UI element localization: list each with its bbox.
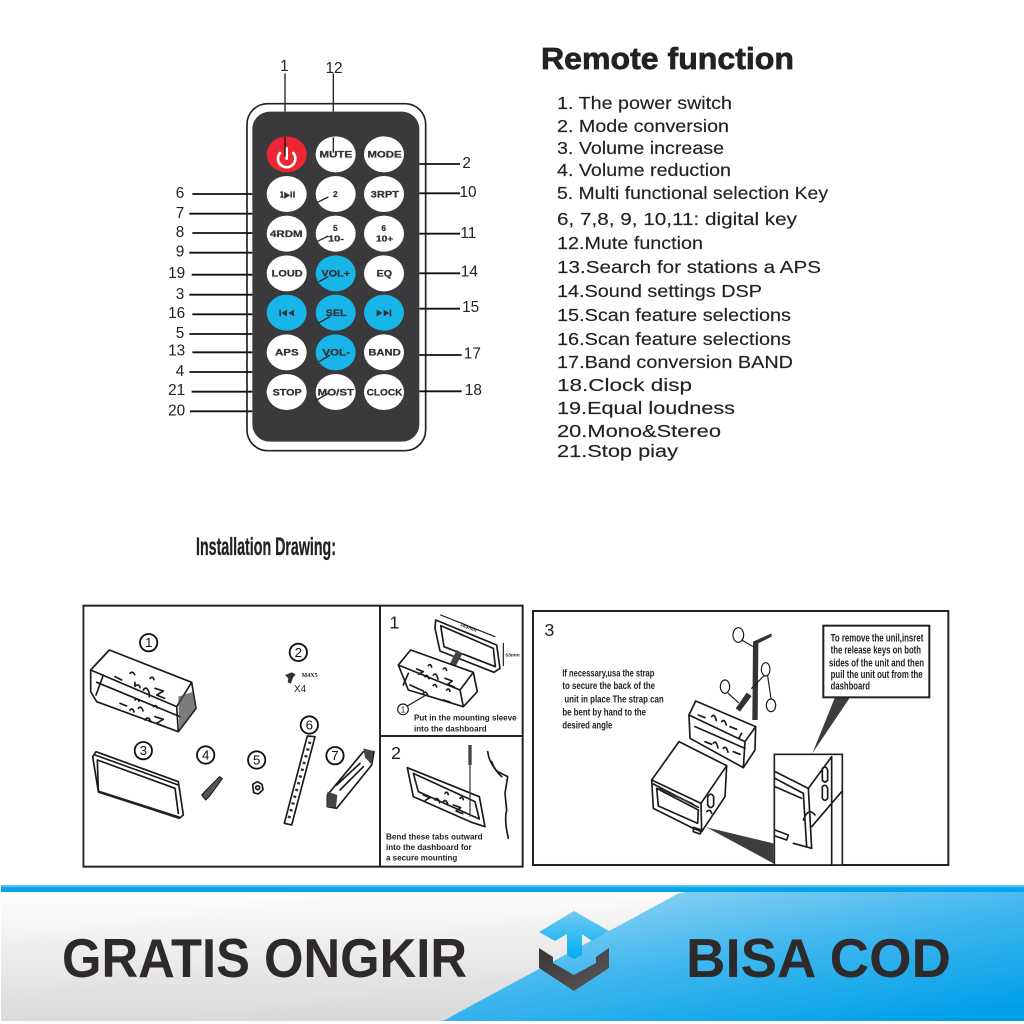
step 2 illustration: 2 [391,743,401,763]
left callout numbers: 3 [176,286,184,303]
step 2 caption: into the dashboard for [386,842,472,852]
button labels: 4RDM [270,229,303,239]
button labels: LOUD [272,269,303,279]
button labels: BAND [368,348,401,358]
left callout numbers: 16 [168,305,185,322]
button labels: 3RPT [371,189,399,199]
left callout numbers: 5 [176,325,184,342]
banner top strip [1,885,1024,892]
button labels: MO/ST [318,387,354,397]
top callout numbers: 1 [280,58,289,75]
right callout numbers: 15 [462,299,479,316]
button labels: CLOCK [367,387,403,397]
function list: 6, 7,8, 9, 10,11: digital key [557,209,797,229]
part 4: bolt [197,746,222,800]
remote body [247,104,426,451]
button labels: EQ [377,269,392,279]
step 1 illustration: 1 [389,612,399,632]
button labels [270,150,403,397]
button labels: MODE [367,150,402,160]
step 1 illustration: 53mm [505,653,520,659]
callout pointer wedge [812,697,850,753]
function list: 18.Clock disp [557,375,692,395]
step 2 caption: Bend these tabs outward [386,831,483,841]
function list: 21.Stop piay [557,441,678,461]
panel frames [83,606,523,867]
part 2: screw: X4 [294,684,307,695]
part 5: nut: 5 [253,752,260,767]
button labels: 10+ [376,234,393,244]
inset detail [774,754,842,865]
step 1 illustration: 1 [401,705,406,714]
button pointer lines [285,73,333,400]
function list: 19.Equal loudness [557,398,735,418]
part 1: mounting sleeve [91,634,196,732]
part 2: screw: 2 [295,645,302,660]
strap instructions: be bent by hand to the [562,708,646,719]
part 4: bolt: 4 [202,747,210,762]
mounting sleeve [689,701,756,768]
left callout numbers: 8 [176,224,184,241]
button labels: VOL- [322,348,350,358]
strap and bolt assembly [720,628,776,720]
step 1 illustration [389,612,520,715]
part 3: trim frame: 3 [140,743,147,758]
banner text: BISA COD: BISA COD [686,927,951,989]
right callout numbers: 14 [461,263,478,280]
left callout numbers: 20 [168,402,185,419]
function list: 5. Multi functional selection Key [557,183,828,203]
part 2: screw [285,644,318,695]
remote control diagram [168,58,482,451]
function list: 16.Scan feature selections [557,329,791,349]
function list: 13.Search for stations a APS [557,257,821,277]
button labels: MUTE [319,150,352,160]
strap instructions: to secure the back of the [562,681,655,692]
callout box: puil the unit out from the [831,669,923,681]
step number: 3 [544,620,554,640]
step 1 caption: into the dashboard [414,723,487,733]
function list [557,93,828,461]
right leader lines [419,164,462,391]
button labels: SEL [326,308,347,318]
heading: Installation Drawing: Installation Drawing: [196,533,336,561]
function list: 20.Mono&Stereo [557,421,721,441]
button labels: 1▶II [279,189,295,199]
left callout numbers: 9 [176,243,184,260]
button labels: 10- [328,234,344,244]
strap instructions [562,669,664,732]
function list: 12.Mute function [557,233,703,253]
part 1: mounting sleeve: 1 [145,635,152,650]
button labels: 6 [381,223,386,233]
right callout numbers: 11 [460,225,476,242]
panel: parts and steps 1 and 2 [83,606,523,867]
part 5: nut [248,751,265,794]
step 2 caption [386,831,483,862]
function list: 15.Scan feature selections [557,305,791,325]
function list: 1. The power switch [557,93,732,113]
part 7: release key [326,747,374,808]
left callout numbers: 7 [176,205,184,222]
panel: step 3 [533,611,948,865]
left callout numbers: 13 [168,342,185,359]
step 1 caption [414,713,517,733]
right callout numbers: 2 [462,155,471,172]
left callout numbers: 4 [176,363,185,380]
callout box [823,626,929,697]
function list: 3. Volume increase [557,138,724,158]
left callout numbers: 6 [176,185,184,202]
pointer wedge to inset [707,827,773,863]
button labels: 5 [333,223,338,233]
button labels: VOL+ [321,269,351,279]
strap instructions: desired angle [562,721,613,732]
part 3: trim frame [93,742,183,818]
head unit [652,742,727,834]
right callout numbers: 10 [459,184,477,201]
button labels: 2 [333,189,338,199]
step 1 illustration: 183mm [459,622,478,634]
strap instructions: If necessary,usa the strap [562,669,654,680]
banner grey section [1,892,1024,1021]
right callout numbers: 18 [465,382,482,399]
button grid [267,136,404,410]
step 1 caption: Put in the mounting sleeve [414,713,517,723]
icon: power symbol [278,137,295,167]
button labels: STOP [273,387,302,397]
banner text: GRATIS ONGKIR: GRATIS ONGKIR [62,927,467,989]
icon: previous track [279,310,294,316]
right callout numbers: 17 [464,345,481,362]
callout box: dashboard [831,680,870,692]
heading: Remote function: Remote function [541,41,794,76]
strap instructions: unit in place The strap can [564,694,664,705]
part 7: release key: 7 [331,748,339,763]
top callout numbers [280,58,343,77]
callout box: To remove the unil,insret [831,632,924,644]
left callout numbers [168,185,185,419]
left leader lines [189,194,252,411]
banner [1,885,1024,1021]
function list: 2. Mode conversion [557,116,729,136]
function list: 4. Volume reduction [557,160,731,180]
left callout numbers: 21 [168,382,185,399]
part 6: strap [284,716,318,825]
part 6: strap: 6 [306,717,313,732]
top callout numbers: 12 [325,60,343,77]
button labels: APS [275,348,299,358]
callout box: the release keys on both [831,645,921,657]
icon: logo [539,911,609,991]
panel frame [533,611,948,865]
function list: 14.Sound settings DSP [557,281,762,301]
part 2: screw: M4X5 [302,673,318,679]
left callout numbers: 19 [168,265,185,282]
icon: next track [377,310,391,316]
callout box: sides of the unit and then [829,657,924,669]
step 2 illustration [391,743,508,838]
banner blue section [438,892,1024,1021]
right callout numbers [459,155,482,399]
step 2 caption: a secure mounting [386,852,457,862]
function list: 17.Band conversion BAND [557,352,793,372]
